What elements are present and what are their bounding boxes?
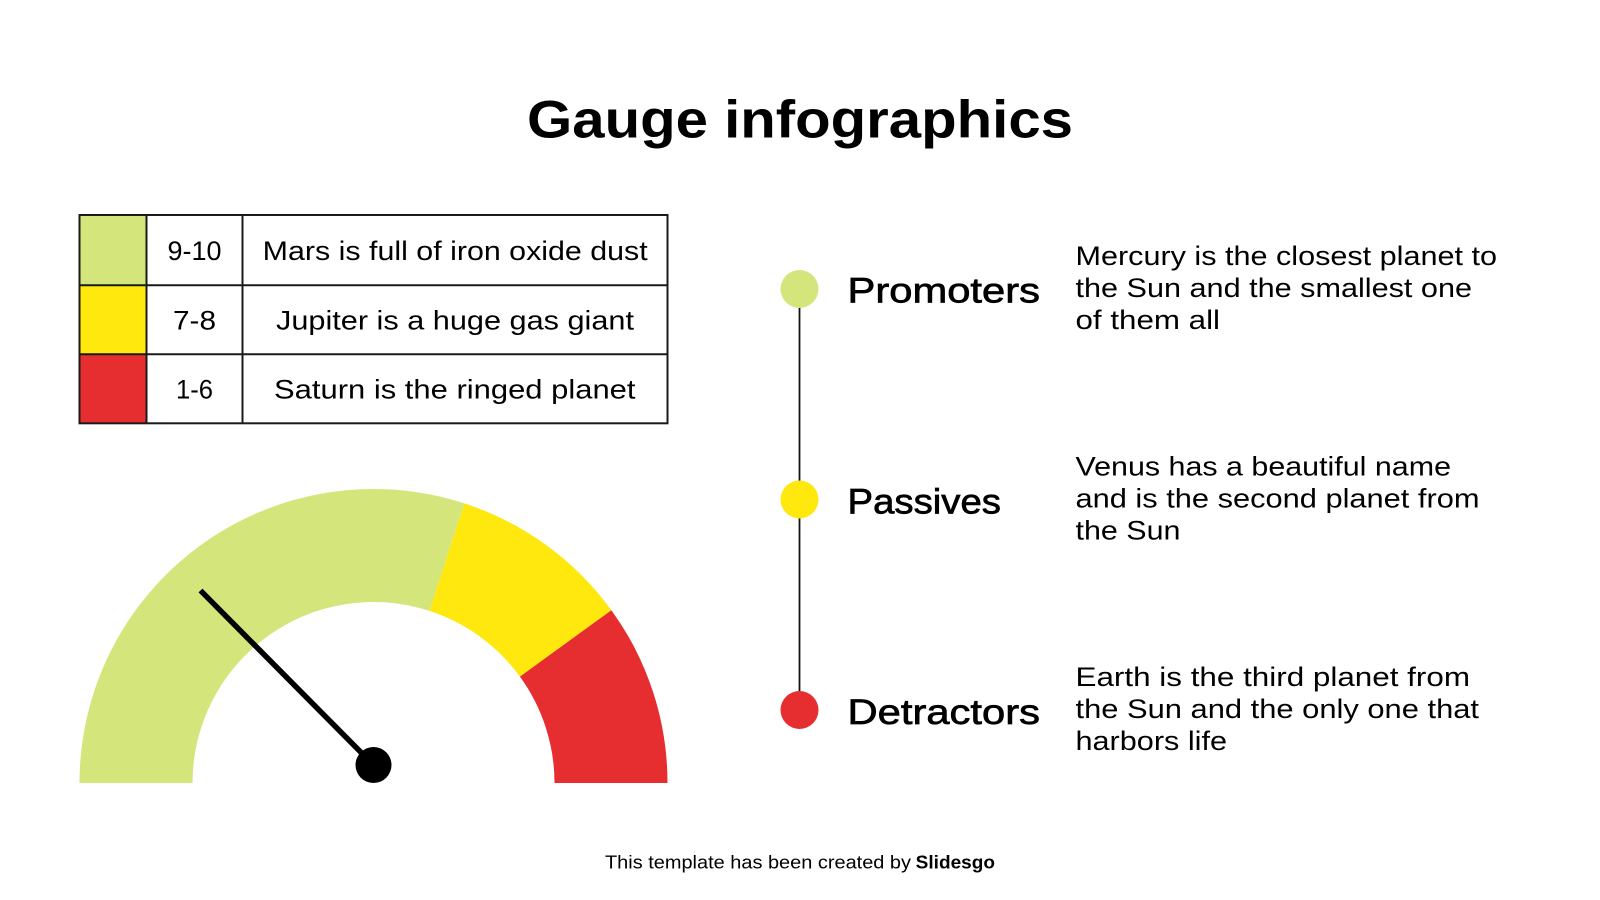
row: 7-8: Jupiter is a huge gas giant [276,305,635,335]
description: promoters: the Sun and the smallest one [1076,273,1472,303]
row: 7-8: 7-8 [173,305,216,335]
description: passives: and is the second planet from [1076,484,1480,514]
marker: passives [780,480,818,518]
chart: gauge [80,489,668,783]
footer credit: This template has been created by [605,852,911,872]
row: 9-10: 9-10 [168,236,222,266]
gauge hub [356,747,392,783]
timeline connector [798,289,800,710]
description: passives [1076,452,1480,546]
description: detractors [1076,662,1480,756]
footer credit: Slidesgo [916,852,995,872]
marker: detractors [780,691,818,729]
table grid [80,215,668,423]
description: passives: the Sun [1076,516,1180,546]
description: detractors: harbors life [1076,726,1227,756]
gauge needle [200,590,374,765]
legend swatch: yellow [79,285,146,354]
row: 9-10: Mars is full of iron oxide dust [263,236,648,266]
row: 1-6 [176,374,636,404]
title: Gauge infographics [527,91,1073,150]
description: passives: Venus has a beautiful name [1076,452,1451,482]
heading: promoters: Promoters [848,271,1040,311]
gauge segment: red [520,610,668,783]
gauge segment: yellow [429,503,611,677]
description: promoters [1076,241,1497,335]
heading: passives: Passives [848,481,1001,521]
panel: passives [780,452,1480,546]
description: promoters: Mercury is the closest planet to [1076,241,1497,271]
description: detractors: the Sun and the only one that [1076,694,1480,724]
panel: promoters [780,241,1497,335]
marker: promoters [780,270,818,308]
row: 1-6: 1-6 [176,374,213,404]
heading: detractors: Detractors [848,692,1040,732]
gauge segment: green [80,489,464,783]
panel: score table [79,215,668,423]
row: 1-6: Saturn is the ringed planet [274,374,636,404]
panel: detractors [780,662,1480,756]
row: 7-8 [173,305,635,335]
legend swatch: red [79,354,146,423]
legend swatch: green [79,215,146,285]
description: detractors: Earth is the third planet from [1076,662,1470,692]
description: promoters: of them all [1076,305,1220,335]
